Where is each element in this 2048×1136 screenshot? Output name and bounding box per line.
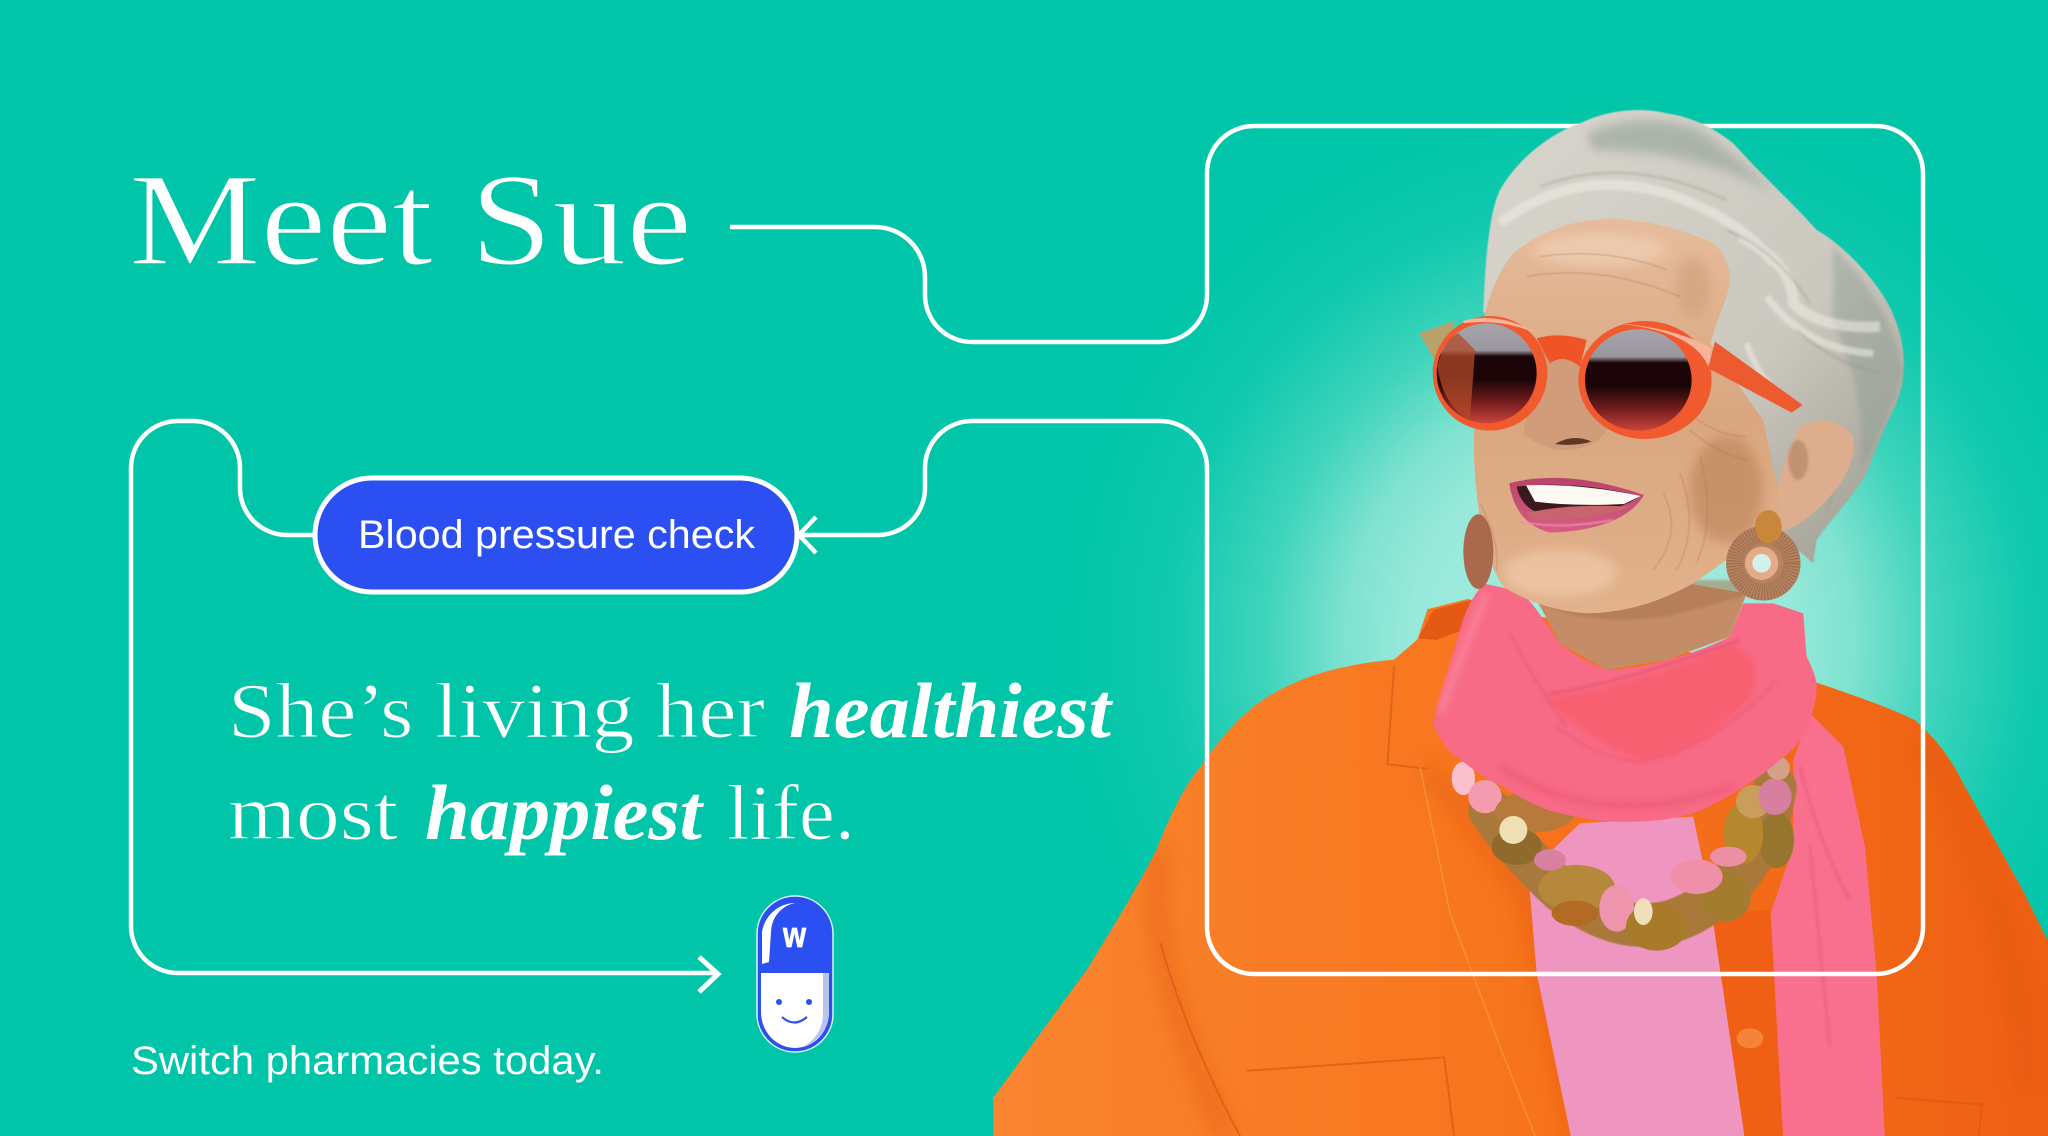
hair dark strands [1540,173,1880,510]
logo w: w [782,914,807,955]
pill: Blood pressure check [315,478,797,592]
left frame peach top [1463,318,1537,333]
photo: Sue's clothes and scarf [1418,580,1885,1136]
hanging scarf [1771,713,1885,1136]
body text: happiest [425,769,704,856]
face shading [1503,233,1763,597]
scarf fold lines [1510,633,1777,762]
nose [1523,350,1608,450]
right lens [1585,329,1692,431]
shirt [1528,817,1745,1136]
photo: Sue's head [1419,110,1904,613]
left tab [1419,321,1455,358]
collar top [1418,600,1472,640]
neck [1537,580,1747,670]
bridge [1537,335,1587,367]
hanging scarf folds [1800,767,1850,1047]
button [1737,1028,1763,1048]
neck shadow [1540,580,1747,620]
photo: Sue's jacket [993,599,2048,1136]
left lens [1437,323,1537,423]
left frame [1433,316,1547,431]
earring left [1463,514,1493,589]
wrinkles [1480,254,1747,570]
face [1474,218,1780,613]
right placket [1693,910,1790,1136]
earring right [1726,510,1801,601]
body text [228,667,1113,856]
right frame peach top [1613,323,1712,367]
necklace [1452,757,1794,951]
connector: pill to capsule [131,421,718,973]
body text: life. [727,769,855,856]
hair top shadow [1587,121,1773,193]
body text: most [228,769,398,856]
temple arm [1708,342,1803,413]
background glow [1000,60,2048,1136]
collar seam [1420,767,1537,1136]
ear [1773,420,1854,533]
arrow: into pill [799,517,816,553]
hair strands [1500,185,1880,407]
jacket shading [1145,778,1535,1131]
connector: Meet Sue line around photo frame to pill [730,126,1923,974]
call to action: Switch pharmacies today. [131,1039,604,1083]
jacket seams and pocket [1160,666,1982,1136]
arrow: to capsule [699,957,718,992]
body text: healthiest [789,667,1113,754]
hair right shadow [1833,247,1903,473]
inner ear [1788,440,1808,480]
right frame [1578,321,1712,439]
sunglasses [1419,316,1803,439]
icon: capsule mascot [757,896,833,1052]
nostril [1555,438,1592,445]
body text: She’s living her [228,667,765,754]
smile [1509,478,1644,533]
left lens reflection [1437,333,1475,420]
scarf folds [1440,593,1756,806]
hair [1483,110,1904,563]
scarf wrap [1433,583,1817,822]
pill: Blood pressure check: Blood pressure check [358,513,756,557]
title: Meet Sue [129,146,692,293]
